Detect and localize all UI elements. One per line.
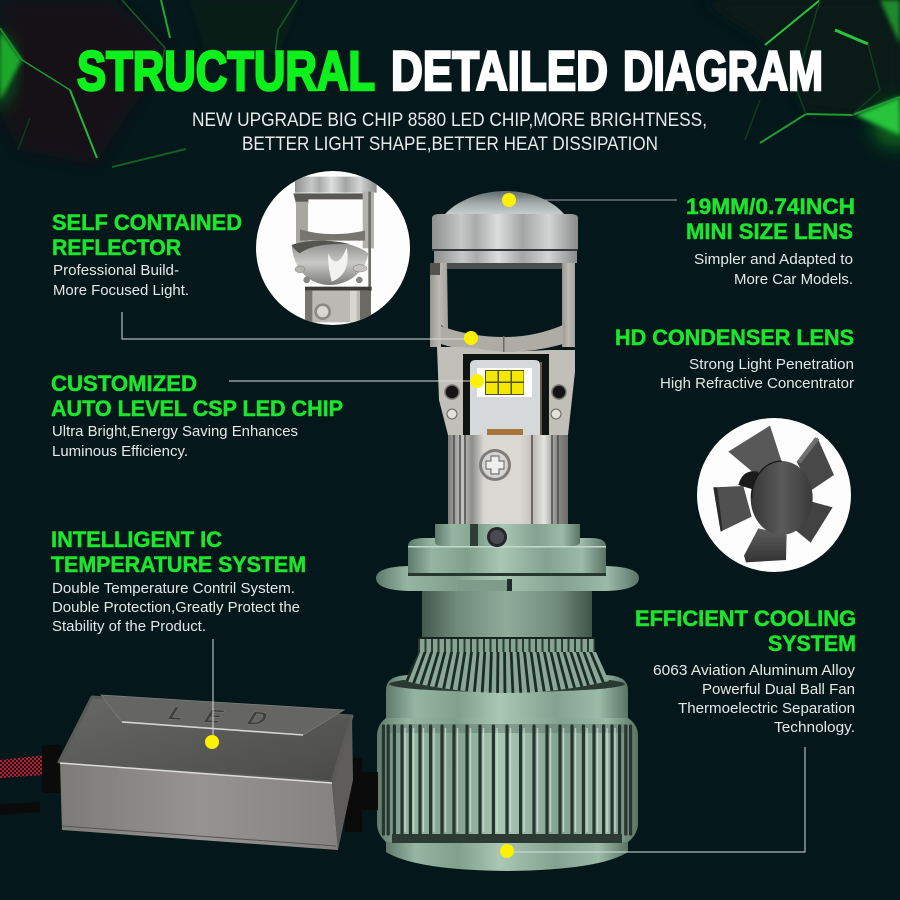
- callout: LED chip: CUSTOMIZED: [51, 371, 197, 396]
- inset: cooling fan: [697, 418, 851, 572]
- box: cover plate: [101, 695, 344, 735]
- callout: IC temperature system: Double Temperature Contril System.: [52, 580, 295, 597]
- box: front face: [60, 763, 338, 850]
- callout: LED chip: Luminous Efficiency.: [52, 443, 188, 460]
- bulb: chip holder: [437, 347, 575, 436]
- subtitle: [192, 110, 707, 155]
- title: DIAGRAM: [623, 39, 823, 102]
- bulb: neck: [422, 591, 592, 638]
- bulb: lower silver cylinder: [448, 435, 568, 524]
- bulb: flared fins: [401, 637, 609, 696]
- callout: IC temperature system: Double Protection,Greatly Protect the: [52, 599, 300, 616]
- callout: mini size lens: Simpler and Adapted to: [694, 251, 853, 268]
- leader: IC: [205, 639, 219, 749]
- LED bulb: [376, 191, 639, 871]
- callout: condenser lens: High Refractive Concentrator: [660, 375, 854, 392]
- leader: cooling: [500, 747, 805, 858]
- control box: [59, 695, 353, 850]
- leader: lens: [502, 193, 677, 207]
- box: top face: [59, 697, 352, 782]
- callout: self contained reflector: REFLECTOR: [52, 235, 181, 260]
- box: embossed LED lettering: [164, 703, 273, 729]
- callout: efficient cooling system: Technology.: [774, 719, 855, 736]
- callout: mini size lens: [686, 194, 855, 288]
- box: embossed LED lettering: E: [200, 706, 229, 727]
- bulb: LED board: [470, 360, 542, 436]
- callout: IC temperature system: Stability of the Product.: [52, 618, 206, 635]
- callout: LED chip: AUTO LEVEL CSP LED CHIP: [51, 396, 343, 421]
- title: [77, 39, 823, 102]
- bulb: bracket: [430, 263, 575, 352]
- inset: reflector detail: [256, 171, 410, 325]
- callout: efficient cooling system: Thermoelectric Separation: [678, 700, 855, 717]
- box: embossed LED lettering: D: [243, 708, 273, 729]
- background: green cracked pattern: [0, 0, 900, 167]
- title: STRUCTURAL: [77, 39, 375, 102]
- bulb: dome lens: [445, 191, 564, 214]
- callout: mini size lens: 19MM/0.74INCH: [686, 194, 855, 219]
- callout: mini size lens: MINI SIZE LENS: [686, 219, 853, 244]
- callout: LED chip: [51, 371, 343, 460]
- callout: IC temperature system: TEMPERATURE SYSTEM: [51, 552, 306, 577]
- callout: efficient cooling system: 6063 Aviation Aluminum Alloy: [653, 662, 856, 679]
- box: embossed LED lettering: L: [164, 703, 191, 724]
- callout: self contained reflector: [52, 210, 242, 299]
- box: side face: [332, 716, 353, 850]
- callout: condenser lens: HD CONDENSER LENS: [615, 325, 854, 350]
- title: DETAILED: [391, 39, 608, 102]
- control box cables: [0, 745, 378, 832]
- callout: condenser lens: [615, 325, 854, 392]
- callout: condenser lens: Strong Light Penetration: [689, 356, 854, 373]
- bulb: heatsink base: [377, 675, 638, 871]
- callout: self contained reflector: More Focused Light.: [53, 282, 189, 299]
- callout: efficient cooling system: [635, 606, 856, 736]
- callout: mini size lens: More Car Models.: [734, 271, 853, 288]
- subtitle: BETTER LIGHT SHAPE,BETTER HEAT DISSIPATION: [242, 134, 658, 155]
- callout: efficient cooling system: EFFICIENT COOLING: [635, 606, 856, 631]
- callout: efficient cooling system: Powerful Dual Ball Fan: [702, 681, 855, 698]
- callout: self contained reflector: Professional Build-: [53, 262, 179, 279]
- callout: efficient cooling system: SYSTEM: [768, 631, 856, 656]
- bulb: lens housing: [432, 214, 578, 269]
- leader: reflector: [122, 312, 478, 345]
- bulb: collar and flange: [376, 524, 639, 594]
- callout: self contained reflector: SELF CONTAINED: [52, 210, 242, 235]
- leader: LED chip: [229, 374, 484, 388]
- callout: LED chip: Ultra Bright,Energy Saving Enhances: [52, 423, 298, 440]
- subtitle: NEW UPGRADE BIG CHIP 8580 LED CHIP,MORE BRIGHTNESS,: [192, 110, 707, 131]
- callout: IC temperature system: [51, 527, 306, 635]
- callout: IC temperature system: INTELLIGENT IC: [51, 527, 222, 552]
